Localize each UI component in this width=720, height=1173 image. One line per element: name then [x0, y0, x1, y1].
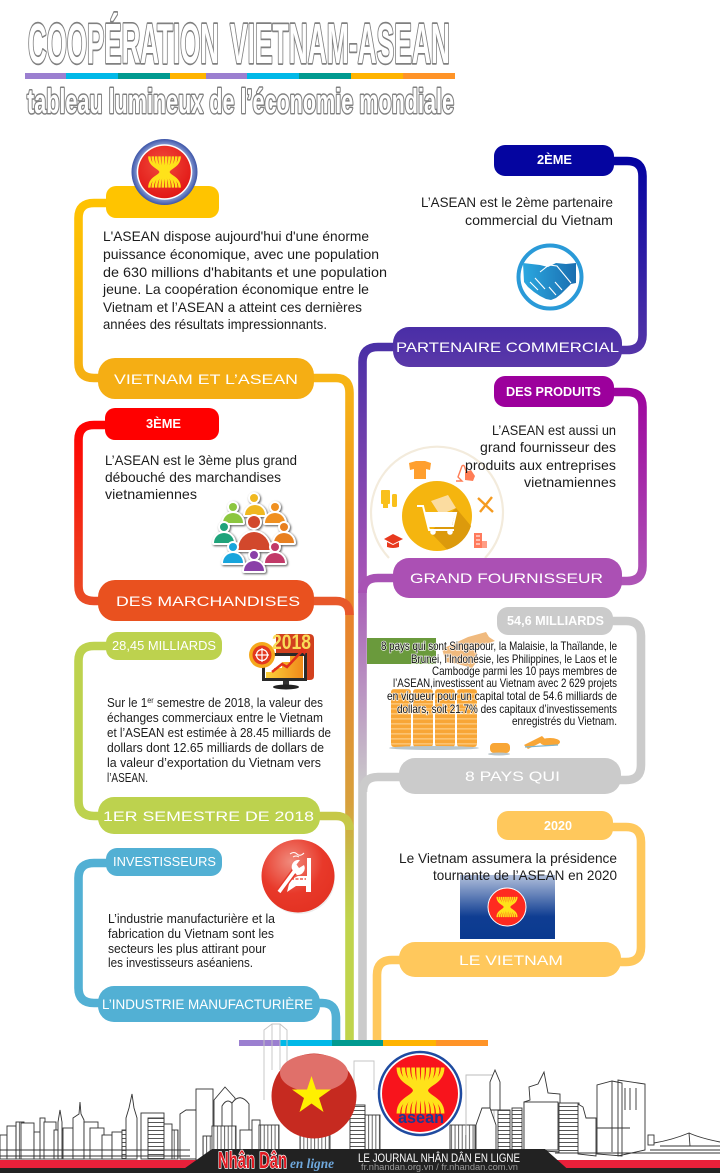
- text block: L’ASEAN est le 2ème partenaire: [421, 194, 613, 210]
- icon: ASEAN flag: [460, 875, 555, 939]
- text: VIETNAM-ASEAN: [230, 12, 450, 76]
- text block: dollars, soit 21.7% des capitaux d’investissements: [397, 702, 617, 716]
- skyline illustration: [0, 1024, 720, 1160]
- icon: 2018 chart: [249, 631, 314, 690]
- logo: Nhan Dan en ligne: Nhân Dân: [218, 1147, 287, 1173]
- text block: vietnamiennes: [524, 474, 616, 490]
- text block: [421, 194, 613, 228]
- panel: grand fournisseur: [362, 376, 642, 598]
- text block: et l’ASEAN est estimée à 28.45 milliards de: [107, 725, 331, 740]
- text block: fabrication du Vietnam sont les: [108, 926, 274, 941]
- label: VIETNAM ET L’ASEAN: [114, 371, 298, 387]
- panel: 3ème: [78, 408, 350, 621]
- text block: [381, 639, 617, 728]
- text block: [465, 422, 616, 490]
- heading: DES PRODUITS: [506, 384, 601, 399]
- text block: Le Vietnam assumera la présidence: [399, 850, 617, 866]
- text block: les investisseurs aséaniens.: [108, 955, 253, 970]
- icon: Vietnam flag ball: [272, 1054, 356, 1138]
- heading: 3ÈME: [146, 416, 181, 431]
- footer text: fr.nhandan.org.vn / fr.nhandan.com.vn: [361, 1162, 518, 1173]
- label: 1ER SEMESTRE DE 2018: [103, 808, 314, 824]
- text block: années des résultats impressionnants.: [103, 316, 327, 332]
- icon: handshake: [518, 246, 582, 308]
- text block: Brunei, l’Indonésie, les Philippines, le Laos et le: [411, 652, 617, 666]
- text block: L’ASEAN est le 3ème plus grand: [105, 452, 297, 468]
- text block: la valeur d’exportation du Vietnam vers: [107, 755, 321, 770]
- text block: débouché des marchandises: [105, 469, 281, 485]
- footer banner: [0, 1147, 720, 1173]
- panel: investisseurs: [78, 840, 336, 1041]
- footer colour bar: [239, 1040, 488, 1046]
- text block: tournante de l’ASEAN en 2020: [433, 867, 617, 883]
- text block: en vigueur pour un capital total de 54.6 milliards de: [387, 689, 617, 703]
- text block: L’ASEAN est aussi un: [492, 422, 616, 438]
- icon: green map and coins: [367, 632, 560, 756]
- heading: 2020: [544, 818, 572, 833]
- text block: commercial du Vietnam: [465, 212, 613, 228]
- label: DES MARCHANDISES: [116, 593, 300, 609]
- icon: 2018 chart: 2018: [272, 631, 311, 654]
- text block: semestre de 2018, la valeur des: [154, 695, 323, 710]
- logo: Nhan Dan en ligne: en ligne: [290, 1157, 334, 1172]
- text block: [107, 695, 331, 785]
- footer text: [358, 1150, 520, 1173]
- subtitle: tableau lumineux de l’économie mondiale: [27, 83, 454, 121]
- heading: INVESTISSEURS: [113, 854, 216, 869]
- panel: Vietnam et l'ASEAN: [78, 139, 387, 1041]
- text block: [108, 911, 276, 970]
- text block: de 630 millions d'habitants et une population: [103, 264, 387, 280]
- text block: [102, 228, 387, 332]
- text block: jeune. La coopération économique entre le: [102, 281, 369, 297]
- panel: 28,45 milliards: [78, 631, 350, 834]
- text block: L'ASEAN dispose aujourd'hui d'une énorme: [103, 228, 369, 244]
- text block: er: [147, 696, 154, 705]
- text block: vietnamiennes: [105, 486, 197, 502]
- icon: shopping cart circle: [371, 447, 503, 558]
- label: L’INDUSTRIE MANUFACTURIÈRE: [102, 996, 313, 1012]
- panel: 2020: [377, 811, 641, 1041]
- text block: enregistrés du Vietnam.: [512, 714, 617, 728]
- heading: 28,45 MILLIARDS: [112, 638, 216, 653]
- heading: 2ÈME: [537, 152, 572, 167]
- icon: people network: [214, 494, 294, 571]
- text block: L’industrie manufacturière et la: [108, 911, 276, 926]
- text block: échanges commerciaux entre le Vietnam: [107, 710, 323, 725]
- text block: Sur le 1: [107, 695, 152, 710]
- heading: 54,6 MILLIARDS: [507, 613, 604, 628]
- icon: ASEAN logo: asean: [398, 1108, 444, 1127]
- text block: 8 pays qui sont Singapour, la Malaisie, la Thaïlande, le: [381, 639, 617, 653]
- text block: Cambodge parmi les 10 pays membres de: [432, 664, 617, 678]
- label: PARTENAIRE COMMERCIAL: [396, 339, 619, 355]
- text block: secteurs les plus attirant pour: [108, 941, 267, 956]
- text block: l’ASEAN,investissent au Vietnam avec 2 629 projets: [393, 676, 617, 690]
- text block: produits aux entreprises: [465, 457, 616, 473]
- icon: ASEAN logo: [379, 1052, 461, 1135]
- text block: [399, 850, 617, 883]
- panel: 54,6 milliards: [363, 607, 641, 794]
- label: LE VIETNAM: [459, 952, 563, 968]
- label: GRAND FOURNISSEUR: [410, 570, 603, 586]
- text block: grand fournisseur des: [480, 439, 616, 455]
- text block: puissance économique, avec une population: [103, 246, 379, 262]
- footer text: LE JOURNAL NHÂN DÂN EN LIGNE: [358, 1150, 520, 1165]
- text block: dollars dont 12.65 milliards de dollars de: [107, 740, 324, 755]
- icon: factory: [262, 840, 335, 914]
- panel: 2ème partenaire: [362, 145, 642, 1041]
- title colour bar: [25, 73, 455, 79]
- text block: Vietnam et l’ASEAN a atteint ces dernières: [103, 299, 362, 315]
- label: 8 PAYS QUI: [465, 768, 560, 784]
- text block: [105, 452, 297, 502]
- title: COOPÉRATION: [28, 12, 219, 76]
- text block: l’ASEAN.: [107, 770, 148, 785]
- icon: ASEAN emblem: [132, 139, 198, 205]
